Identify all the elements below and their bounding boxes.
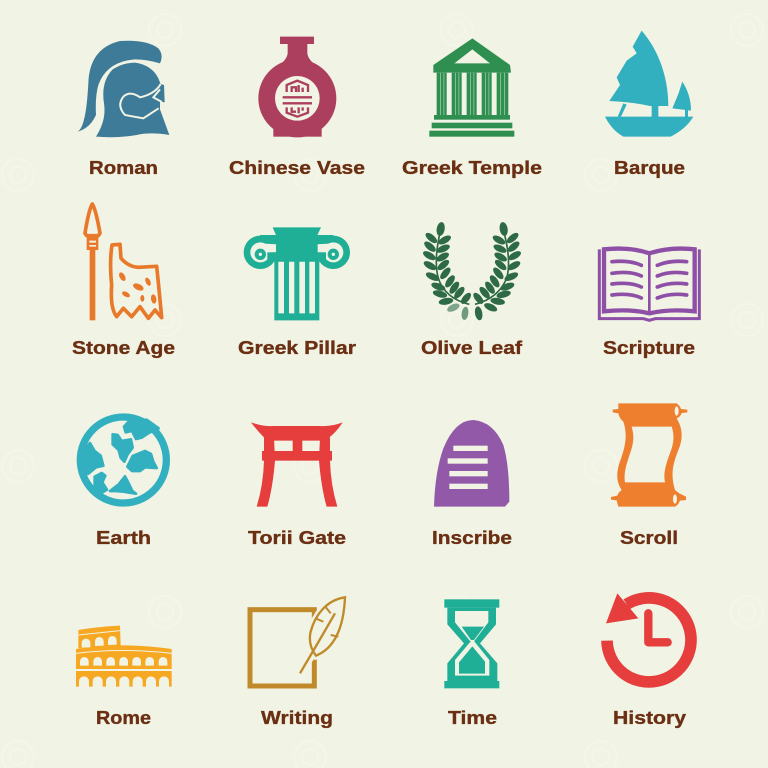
- icon: open book scripture: [599, 249, 699, 320]
- icon: greek temple: [429, 38, 514, 137]
- label: Time: Time: [448, 708, 497, 728]
- label: Scripture: Scripture: [603, 338, 695, 358]
- icon: paper scroll: [611, 403, 687, 507]
- icon: roman helmet: [77, 41, 169, 137]
- label: History: History: [613, 708, 686, 728]
- icon: inscribed stone: [434, 420, 509, 507]
- label: Rome: Rome: [96, 708, 151, 728]
- icon: olive leaf wreath: [422, 221, 522, 321]
- label: Barque: Barque: [614, 158, 685, 178]
- icon: history clock arrow: [606, 593, 691, 682]
- label: Greek Temple: Greek Temple: [402, 158, 542, 178]
- icon: colosseum rome: [76, 626, 172, 687]
- icon: writing paper and quill: [250, 597, 345, 686]
- label: Greek Pillar: Greek Pillar: [238, 338, 356, 358]
- label: Chinese Vase: Chinese Vase: [229, 158, 365, 178]
- label: Writing: Writing: [261, 708, 333, 728]
- icon: greek pillar: [244, 227, 350, 320]
- icon: hourglass time: [444, 599, 499, 688]
- label: Stone Age: Stone Age: [72, 338, 175, 358]
- icon: torii gate: [251, 422, 343, 507]
- icon: barque ship: [605, 31, 693, 137]
- label: Torii Gate: Torii Gate: [248, 528, 346, 548]
- icon: chinese vase: [258, 37, 336, 137]
- label: Scroll: Scroll: [620, 528, 678, 548]
- label: Roman: Roman: [89, 158, 158, 178]
- icon: stone age spear and hide: [85, 204, 162, 320]
- label: Olive Leaf: Olive Leaf: [421, 338, 523, 358]
- label: Earth: Earth: [96, 528, 151, 548]
- icon: earth globe: [79, 417, 166, 503]
- label: Inscribe: Inscribe: [432, 528, 512, 548]
